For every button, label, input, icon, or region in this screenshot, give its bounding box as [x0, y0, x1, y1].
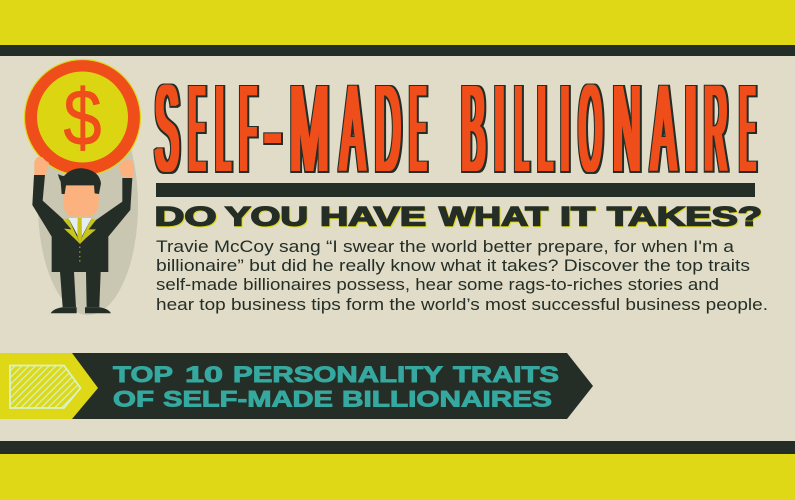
subtitle: HAVE [320, 202, 426, 232]
illustration: businessman holding coin [24, 60, 140, 315]
title underline bar [156, 183, 755, 197]
shoes [51, 307, 111, 313]
title: SELF-MADE BILLIONAIRE: N [613, 61, 640, 198]
banner heading: 10 [185, 362, 223, 387]
figure shadow ellipse [38, 95, 138, 315]
icon: hatched arrow tag [10, 366, 80, 408]
title: SELF-MADE BILLIONAIRE: E [410, 61, 425, 198]
tie and lapels [63, 218, 96, 244]
intro paragraph: Travie McCoy sang “I swear the world better prepare, for when I'm a [156, 237, 735, 256]
title: SELF-MADE BILLIONAIRE: - [265, 61, 281, 198]
banner dark arrow [70, 353, 593, 419]
shirt [68, 218, 92, 240]
bottom dark band [0, 441, 795, 455]
banner heading [113, 362, 559, 412]
subtitle: DO [154, 202, 216, 232]
banner heading: TRAITS [453, 362, 559, 387]
dollar sign: $ [64, 73, 102, 162]
subtitle: IT [560, 202, 596, 232]
title: SELF-MADE BILLIONAIRE: A [652, 61, 675, 198]
neck and head [63, 183, 99, 217]
title: SELF-MADE BILLIONAIRE: L [217, 61, 230, 198]
title: SELF-MADE BILLIONAIRE: O [580, 61, 602, 198]
banner heading: BILLIONAIRES [342, 386, 552, 412]
subtitle: TAKES? [607, 202, 762, 232]
title: SELF-MADE BILLIONAIRE: L [516, 61, 528, 198]
banner heading: SELF-MADE [163, 386, 333, 412]
title: SELF-MADE BILLIONAIRE: D [376, 61, 400, 198]
intro paragraph: billionaire” but did he really know what it takes? Discover the top traits [156, 256, 750, 275]
title: SELF-MADE BILLIONAIRE: S [155, 61, 178, 198]
title: SELF-MADE BILLIONAIRE: E [189, 61, 204, 198]
banner heading: TOP [113, 362, 173, 387]
intro paragraph: self-made billionaires possess, hear some rags-to-riches stories and [156, 275, 719, 294]
subtitle [154, 202, 762, 232]
title: SELF-MADE BILLIONAIRE: R [705, 61, 727, 198]
jacket and arms [32, 175, 132, 272]
bottom yellow band [0, 454, 795, 500]
title: SELF-MADE BILLIONAIRE: I [494, 61, 505, 198]
title: SELF-MADE BILLIONAIRE: L [539, 61, 552, 198]
title: SELF-MADE BILLIONAIRE: I [561, 61, 569, 198]
hands [34, 157, 134, 178]
subtitle: WHAT [439, 202, 549, 232]
title: SELF-MADE BILLIONAIRE: I [684, 61, 698, 198]
jacket buttons [78, 247, 81, 262]
subtitle: YOU [225, 202, 308, 232]
legs [60, 272, 101, 307]
banner heading: PERSONALITY [233, 362, 443, 387]
intro paragraph [156, 237, 768, 314]
title: SELF-MADE BILLIONAIRE: F [240, 61, 256, 198]
top dark band [0, 45, 795, 56]
hair [58, 168, 101, 194]
top yellow band [0, 0, 795, 45]
title: SELF-MADE BILLIONAIRE: M [290, 61, 329, 198]
section banner [0, 353, 593, 419]
title: SELF-MADE BILLIONAIRE: A [341, 61, 364, 198]
banner heading: OF [113, 386, 154, 412]
title: SELF-MADE BILLIONAIRE [155, 61, 754, 198]
title: SELF-MADE BILLIONAIRE: B [462, 61, 485, 198]
intro paragraph: hear top business tips form the world’s most successful business people. [156, 295, 768, 314]
businessman [32, 157, 134, 313]
coin [24, 60, 140, 176]
banner yellow arrow [0, 353, 98, 419]
